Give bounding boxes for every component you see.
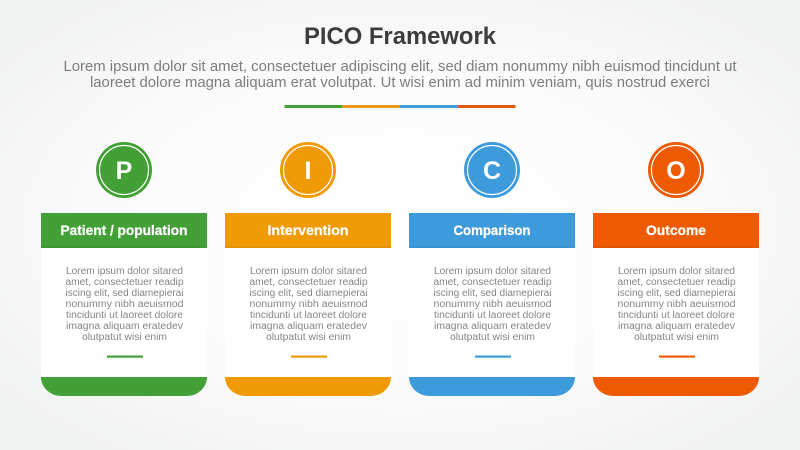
card description: imagna aliquam eratedev [250, 321, 367, 332]
card description: amet, consectetuer readip [434, 277, 552, 288]
card body [41, 248, 207, 378]
card footer band [225, 377, 391, 396]
card description: amet, consectetuer readip [250, 277, 368, 288]
card description: Lorem ipsum dolor sitared [250, 266, 367, 277]
card description: Lorem ipsum dolor sitared [618, 266, 735, 277]
card description: nonummy nibh aeuismod [618, 299, 736, 310]
card description: Lorem ipsum dolor sitared [434, 266, 551, 277]
card description: tincidunti ut laoreet dolore [434, 310, 551, 321]
card description: nonummy nibh aeuismod [434, 299, 552, 310]
card description: imagna aliquam eratedev [66, 321, 183, 332]
card description: tincidunti ut laoreet dolore [250, 310, 367, 321]
card description: Lorem ipsum dolor sitared [66, 266, 183, 277]
card description: tincidunti ut laoreet dolore [618, 310, 735, 321]
card footer band [593, 377, 759, 396]
icon: P circle [96, 142, 152, 198]
short accent line [291, 356, 327, 358]
icon: C circle [464, 142, 520, 198]
title: PICO Framework [304, 23, 497, 50]
subtitle text block: laoreet dolore magna aliquam erat volutpat. Ut wisi enim ad minim veniam, quis nostrud exerci [90, 74, 710, 91]
four-colour title divider [284, 105, 516, 108]
card description: olutpatut wisi enim [634, 332, 719, 343]
card description: iscing elit, sed diamepierai [66, 288, 184, 299]
card description: iscing elit, sed diamepierai [618, 288, 736, 299]
card body [593, 248, 759, 378]
panel: patient / population [41, 142, 207, 396]
short accent line [659, 356, 695, 358]
card description [250, 266, 368, 343]
card description: nonummy nibh aeuismod [66, 299, 184, 310]
card body [225, 248, 391, 378]
short accent line [107, 356, 143, 358]
panel: outcome [593, 142, 759, 396]
card description: nonummy nibh aeuismod [250, 299, 368, 310]
icon: I circle [280, 142, 336, 198]
card description [66, 266, 184, 343]
card description: amet, consectetuer readip [66, 277, 184, 288]
card description: iscing elit, sed diamepierai [250, 288, 368, 299]
card footer band [409, 377, 575, 396]
icon: I circle: I [305, 157, 311, 185]
icon: O circle: O [666, 157, 686, 185]
card description: olutpatut wisi enim [82, 332, 167, 343]
card description: imagna aliquam eratedev [434, 321, 551, 332]
card description [434, 266, 552, 343]
icon: O circle [648, 142, 704, 198]
subtitle text block: Lorem ipsum dolor sit amet, consectetuer adipiscing elit, sed diam nonummy nibh euismod tincidunt ut [64, 58, 737, 75]
card header: outcome: Outcome [646, 222, 706, 238]
short accent line [475, 356, 511, 358]
card description: tincidunti ut laoreet dolore [66, 310, 183, 321]
card header: outcome [593, 213, 759, 248]
panel: comparison [409, 142, 575, 396]
card description [618, 266, 736, 343]
card header: intervention [225, 213, 391, 248]
panel: intervention [225, 142, 391, 396]
card header: intervention: Intervention [268, 222, 348, 238]
icon: C circle: C [483, 157, 501, 185]
subtitle text block [64, 58, 737, 91]
card description: olutpatut wisi enim [450, 332, 535, 343]
icon: P circle: P [116, 157, 132, 185]
card header: comparison: Comparison [454, 222, 530, 238]
card description: iscing elit, sed diamepierai [434, 288, 552, 299]
card header: comparison [409, 213, 575, 248]
card description: imagna aliquam eratedev [618, 321, 735, 332]
card header: patient / population: Patient / population [60, 222, 188, 238]
card description: olutpatut wisi enim [266, 332, 351, 343]
card description: amet, consectetuer readip [618, 277, 736, 288]
card body [409, 248, 575, 378]
card header: patient / population [41, 213, 207, 248]
card footer band [41, 377, 207, 396]
